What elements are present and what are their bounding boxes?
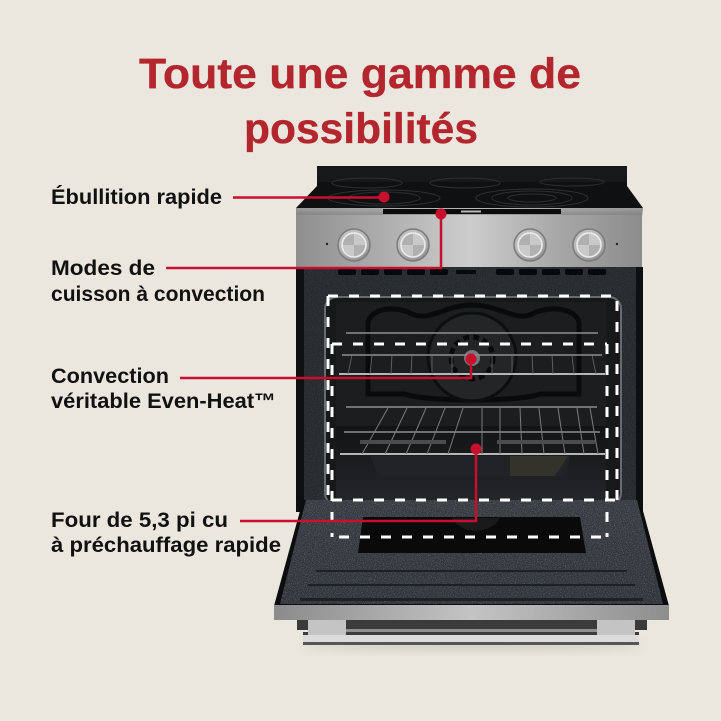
handle shadow: [302, 640, 642, 650]
callout: Even-Heat true convection: [51, 354, 476, 413]
title: Toute une gamme de: [139, 50, 581, 98]
control panel: [296, 208, 643, 267]
dashed capacity outlines: [328, 296, 617, 537]
callout: rapid boil: [51, 186, 390, 209]
open door: [274, 500, 669, 606]
callout: rapid boil: Ébullition rapide: [51, 186, 222, 209]
convection fan: [368, 305, 579, 401]
callout: oven capacity and fast preheat: [51, 444, 482, 557]
callout: oven capacity and fast preheat: Four de 5,3 pi cu: [51, 509, 228, 532]
range illustration: [274, 166, 669, 650]
callout: Even-Heat true convection: Convection: [51, 365, 169, 388]
racks: [339, 333, 605, 454]
door handle: [274, 605, 669, 645]
vents: [338, 269, 606, 275]
callout: convection cooking modes: cuisson à convection: [51, 283, 265, 306]
callout: convection cooking modes: [51, 208, 446, 306]
title: [139, 50, 581, 153]
door window: [358, 517, 586, 553]
callout: oven capacity and fast preheat: à préchauffage rapide: [51, 534, 281, 557]
callout: convection cooking modes: Modes de: [51, 257, 155, 280]
knobs: [338, 229, 605, 261]
oven cavity: [325, 297, 621, 505]
oven body: [296, 267, 643, 512]
title: possibilités: [244, 105, 478, 153]
cooktop: [296, 166, 643, 208]
callout: Even-Heat true convection: véritable Even-Heat™: [51, 390, 276, 413]
